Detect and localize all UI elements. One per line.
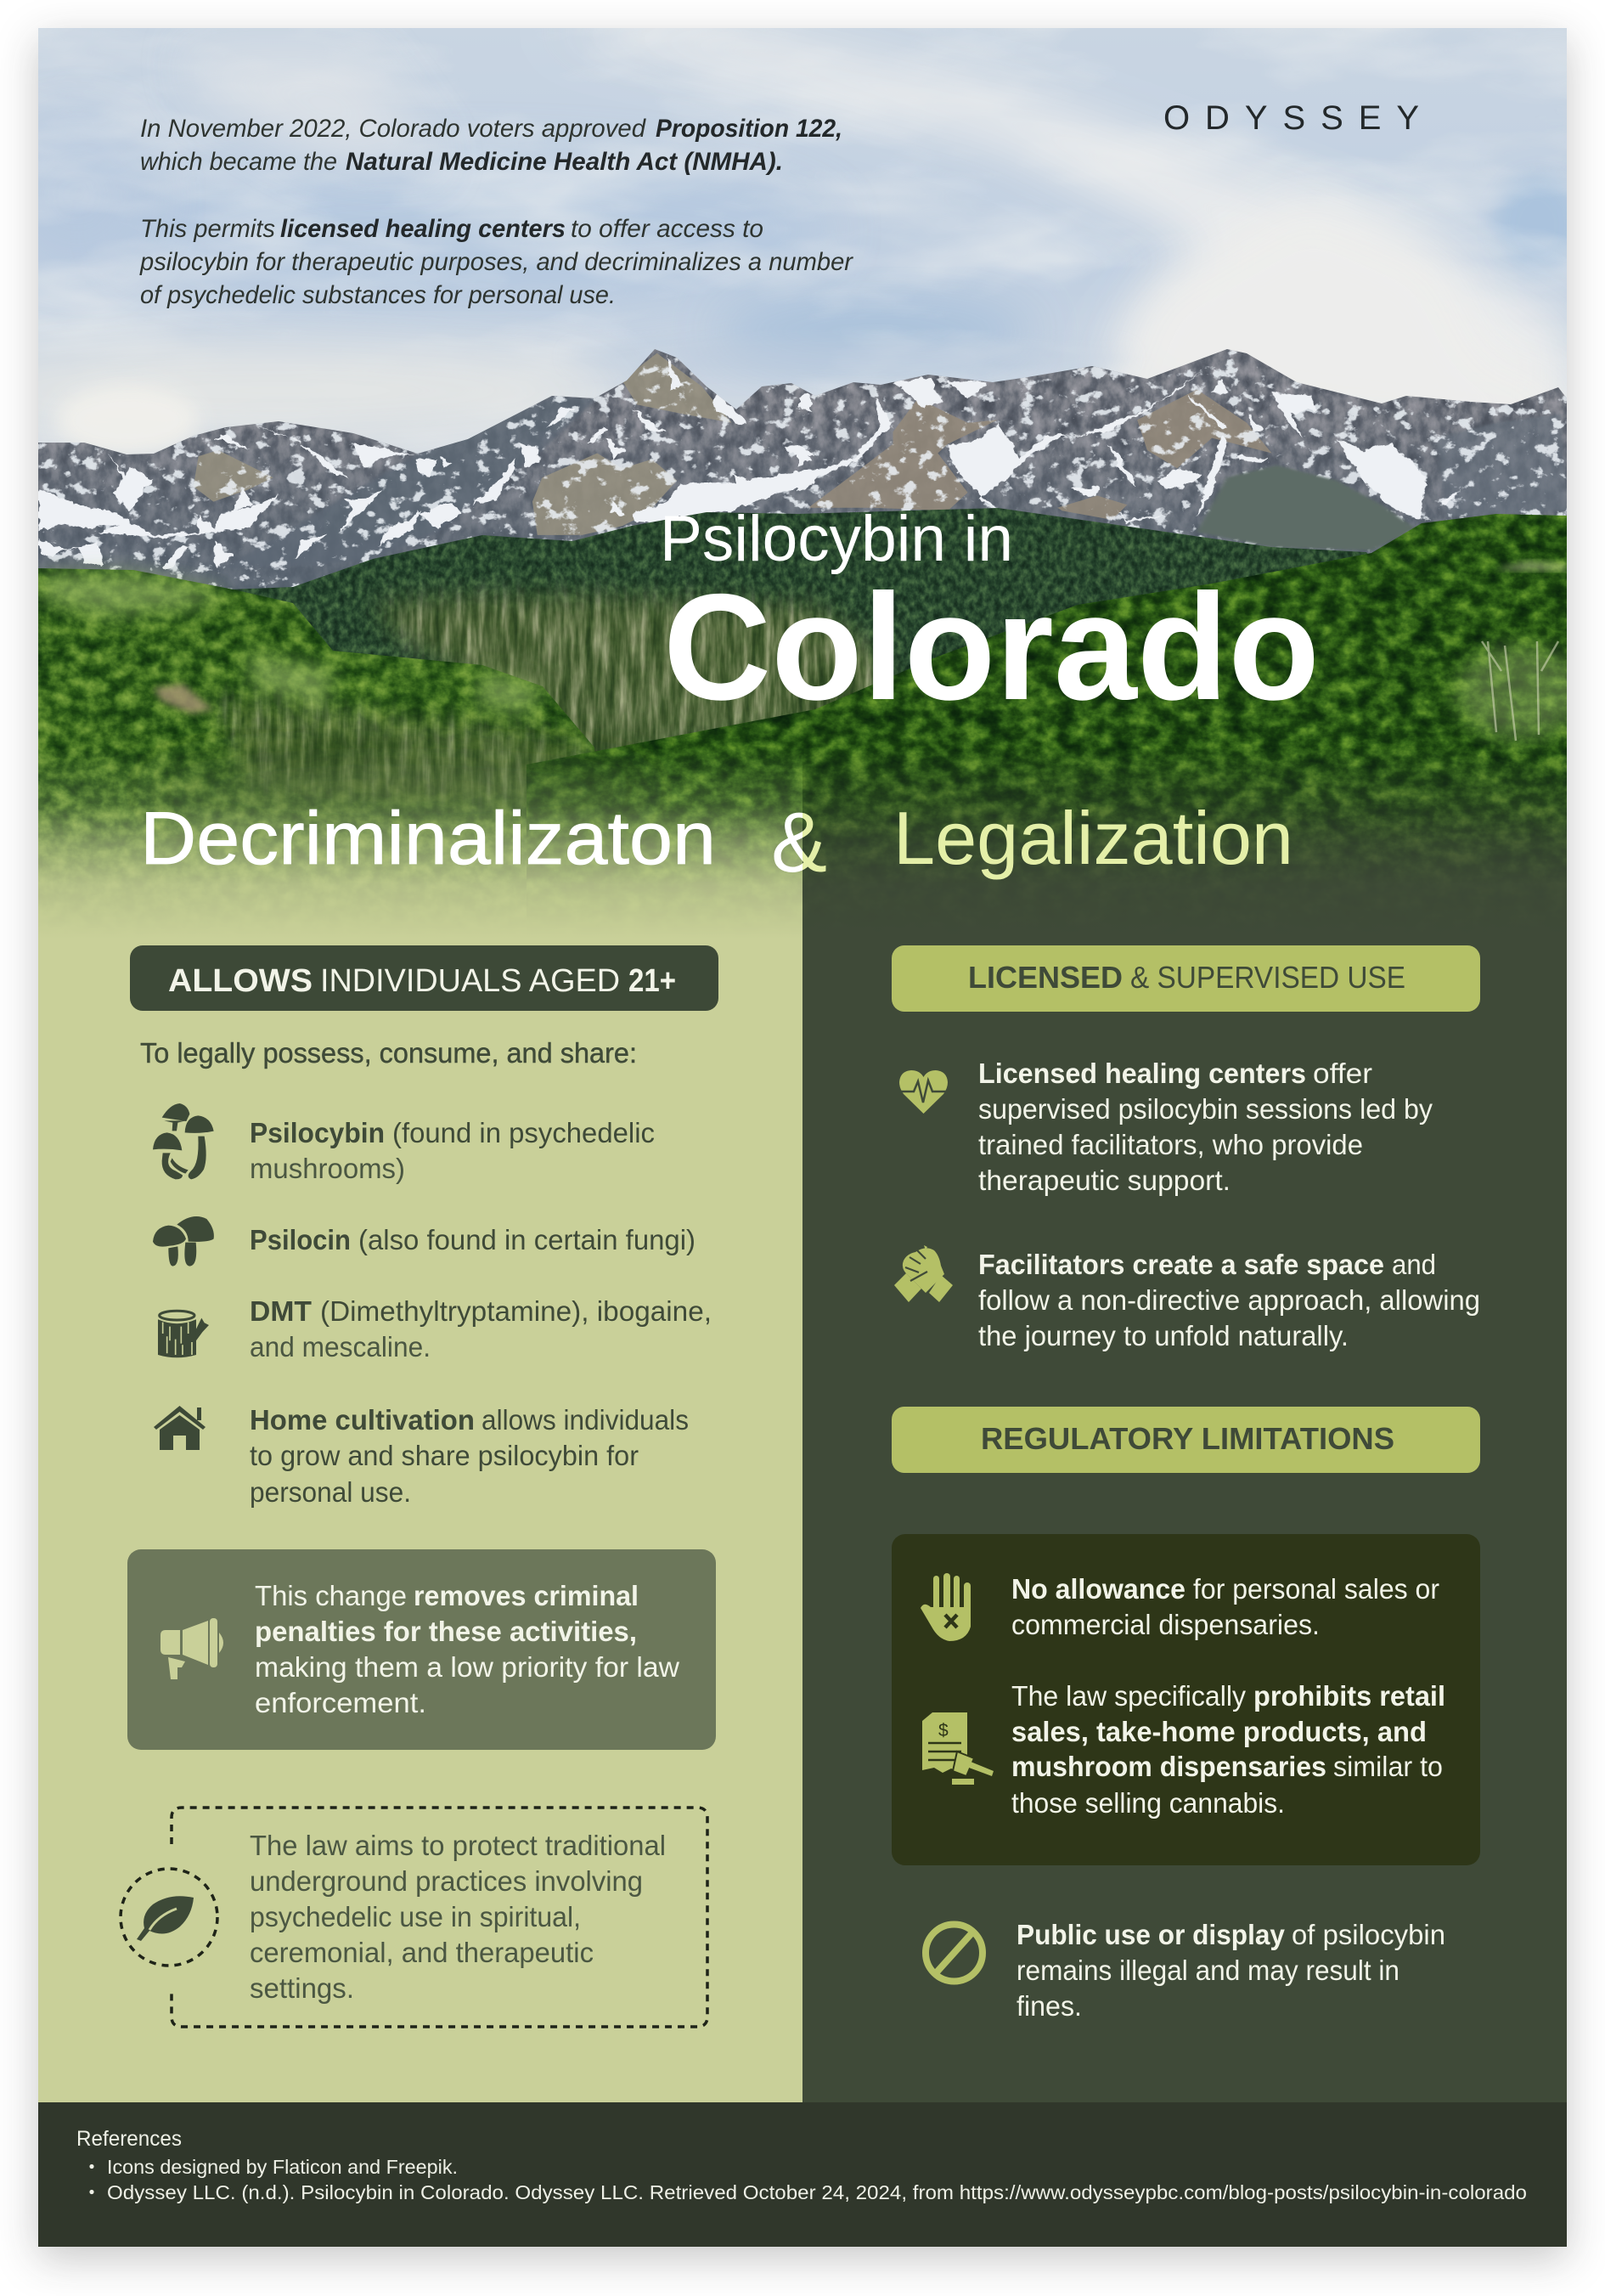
callout: removes criminal penalties: making them a low priority for law bbox=[255, 1651, 679, 1683]
icon: prohibited sign bbox=[926, 1925, 983, 1981]
lead-in text: To legally possess, consume, and share: bbox=[140, 1037, 637, 1069]
text: home cultivation: Home cultivation bbox=[250, 1404, 475, 1436]
intro paragraph: In November 2022, Colorado voters approved bbox=[140, 115, 646, 143]
callout: protecting traditional practices: psychedelic use in spiritual, bbox=[250, 1901, 581, 1932]
icon: heart with pulse bbox=[899, 1070, 948, 1114]
text: home cultivation: to grow and share psilocybin for bbox=[250, 1440, 639, 1471]
text: psilocin: Psilocin bbox=[250, 1224, 351, 1255]
title: Psilocybin in bbox=[660, 503, 1013, 575]
footer: references bbox=[38, 2102, 1567, 2247]
fog band above the fade bbox=[144, 756, 654, 824]
lower aspen trunks bbox=[212, 697, 586, 803]
exposed earth patch bbox=[154, 684, 212, 714]
callout: sales prohibitions: mushroom dispensaries bbox=[1011, 1751, 1326, 1782]
icon: hand with x bbox=[921, 1573, 971, 1641]
callout: removes criminal penalties: enforcement. bbox=[255, 1687, 426, 1718]
text: public use: Public use or display bbox=[1016, 1919, 1286, 1950]
panel: decriminalization bbox=[121, 945, 718, 2027]
callout: sales prohibitions: commercial dispensaries. bbox=[1011, 1609, 1320, 1640]
text: DMT: (Dimethyltryptamine), ibogaine, bbox=[320, 1295, 712, 1327]
panel: legalization bbox=[892, 945, 1480, 2022]
text: public use: of psilocybin bbox=[1292, 1919, 1445, 1950]
pill: allows individuals aged 21+ bbox=[130, 945, 718, 1011]
intro paragraph: to offer access to bbox=[571, 215, 763, 243]
text: facilitators: follow a non-directive approach, allowing bbox=[978, 1284, 1480, 1316]
pill: allows individuals aged 21+: ALLOWS bbox=[168, 963, 313, 999]
logo: Odyssey: ODYSSEY bbox=[1163, 99, 1419, 137]
intro paragraph: licensed healing centers bbox=[280, 215, 566, 243]
callout: protecting traditional practices bbox=[121, 1808, 707, 2027]
text: home cultivation bbox=[250, 1404, 689, 1508]
callout: sales prohibitions: No allowance bbox=[1011, 1573, 1185, 1605]
text: DMT: and mescaline. bbox=[250, 1331, 431, 1362]
text: psilocin: (also found in certain fungi) bbox=[358, 1224, 696, 1255]
dark conifer forest hill bbox=[232, 508, 1367, 751]
intro paragraph: of psychedelic substances for personal use. bbox=[140, 281, 616, 309]
callout: removes criminal penalties: removes criminal bbox=[414, 1580, 639, 1611]
callout: sales prohibitions: prohibits retail bbox=[1253, 1680, 1445, 1712]
pill: licensed and supervised use bbox=[892, 945, 1480, 1012]
callout: sales prohibitions: similar to bbox=[1333, 1751, 1443, 1782]
alpine meadow patches bbox=[42, 573, 543, 714]
footer: references: References bbox=[76, 2127, 182, 2151]
bright green slope on left bbox=[38, 568, 611, 943]
callout: protecting traditional practices: settings. bbox=[250, 1972, 354, 2004]
text: DMT bbox=[250, 1295, 712, 1362]
text: licensed healing centers: therapeutic support. bbox=[978, 1165, 1230, 1196]
page background: lower panels bbox=[38, 934, 1567, 2103]
icon: receipt and gavel: $ bbox=[938, 1721, 949, 1740]
section heading: Decriminalization & Legalization: Legalization bbox=[893, 796, 1293, 880]
text: psilocybin: Psilocybin bbox=[250, 1117, 385, 1148]
icon: tree stump bbox=[158, 1311, 209, 1357]
footer: references: Icons designed by Flaticon and Freepik. bbox=[107, 2156, 458, 2178]
icon: psilocybin mushrooms bbox=[153, 1103, 214, 1179]
pill: licensed and supervised use: & SUPERVISED USE bbox=[1130, 960, 1405, 995]
pill: licensed and supervised use: LICENSED bbox=[968, 960, 1123, 995]
text: home cultivation: allows individuals bbox=[482, 1404, 689, 1436]
text: facilitators: the journey to unfold naturally. bbox=[978, 1320, 1349, 1351]
pale grass near bare trees bbox=[1456, 561, 1584, 739]
footer: references: Odyssey LLC. (n.d.). Psilocybin in Colorado. Odyssey LLC. Retrieved October 24, 2024, from https://www.odysseypbc.com/blog-posts/psilocybin-in-colorado bbox=[107, 2181, 1527, 2203]
icon: megaphone bbox=[160, 1618, 223, 1679]
callout: removes criminal penalties: penalties for these activities, bbox=[255, 1616, 637, 1647]
right dark fade overlay bbox=[802, 747, 1567, 939]
text: psilocybin bbox=[250, 1117, 655, 1184]
text: facilitators bbox=[978, 1249, 1480, 1351]
callout: protecting traditional practices: underground practices involving bbox=[250, 1865, 643, 1897]
icon: house bbox=[154, 1406, 206, 1450]
text: psilocybin: (found in psychedelic bbox=[392, 1117, 655, 1148]
text: public use: fines. bbox=[1016, 1990, 1082, 2022]
text: facilitators: and bbox=[1392, 1249, 1436, 1280]
icon: receipt and gavel bbox=[922, 1712, 994, 1785]
callout: removes criminal penalties bbox=[127, 1549, 716, 1750]
icon: psilocin mushrooms bbox=[153, 1216, 214, 1266]
section heading: Decriminalization & Legalization: & bbox=[771, 795, 827, 890]
icon: leaf bbox=[137, 1896, 194, 1941]
hero photo: mountains and forest bbox=[0, 28, 1584, 943]
mountain range bbox=[38, 349, 1567, 590]
text: public use bbox=[1016, 1919, 1445, 2022]
intro paragraph: Proposition 122, bbox=[656, 115, 842, 143]
pill: allows individuals aged 21+: INDIVIDUALS AGED bbox=[320, 963, 620, 999]
intro paragraph: This permits bbox=[140, 215, 275, 243]
text: DMT: DMT bbox=[250, 1295, 312, 1327]
callout: protecting traditional practices: The law aims to protect traditional bbox=[250, 1830, 666, 1861]
intro paragraph: which became the bbox=[140, 148, 337, 176]
callout: sales prohibitions: for personal sales or bbox=[1193, 1573, 1439, 1605]
bright shrub hills on right bbox=[527, 514, 1567, 943]
pill: regulatory limitations: REGULATORY LIMITATIONS bbox=[981, 1421, 1394, 1456]
icon: clasped hands bbox=[894, 1245, 953, 1302]
text: licensed healing centers: Licensed healing centers bbox=[978, 1058, 1306, 1089]
callout: sales prohibitions: sales, take-home products, and bbox=[1011, 1716, 1427, 1747]
pill: allows individuals aged 21+: 21+ bbox=[628, 963, 676, 999]
callout: protecting traditional practices: ceremonial, and therapeutic bbox=[250, 1937, 594, 1968]
intro paragraph: psilocybin for therapeutic purposes, and decriminalizes a number bbox=[139, 248, 853, 276]
sky with clouds bbox=[0, 28, 1580, 470]
pale aspen grove bbox=[374, 579, 873, 751]
callout: sales prohibitions: The law specifically bbox=[1011, 1680, 1246, 1712]
bare trees at right bbox=[1482, 641, 1558, 741]
left pale fade overlay bbox=[38, 747, 802, 939]
text: licensed healing centers bbox=[978, 1058, 1433, 1196]
title: Colorado bbox=[663, 562, 1320, 731]
text: licensed healing centers: offer bbox=[1313, 1058, 1372, 1089]
text: licensed healing centers: supervised psilocybin sessions led by bbox=[978, 1093, 1433, 1125]
text: public use: remains illegal and may result in bbox=[1016, 1955, 1399, 1986]
text: home cultivation: personal use. bbox=[250, 1476, 411, 1508]
callout: sales prohibitions: those selling cannabis. bbox=[1011, 1787, 1285, 1819]
text: psilocybin: mushrooms) bbox=[250, 1153, 405, 1184]
intro paragraph bbox=[139, 115, 853, 309]
text: facilitators: Facilitators create a safe space bbox=[978, 1249, 1384, 1280]
section heading: Decriminalization & Legalization: Decriminalizaton bbox=[140, 796, 716, 880]
callout: removes criminal penalties: This change bbox=[255, 1580, 407, 1611]
intro paragraph: Natural Medicine Health Act (NMHA). bbox=[346, 148, 783, 176]
section heading: Decriminalization & Legalization bbox=[140, 795, 1293, 890]
text: licensed healing centers: trained facilitators, who provide bbox=[978, 1129, 1363, 1160]
callout: sales prohibitions bbox=[892, 1534, 1480, 1865]
pill: regulatory limitations bbox=[892, 1407, 1480, 1473]
